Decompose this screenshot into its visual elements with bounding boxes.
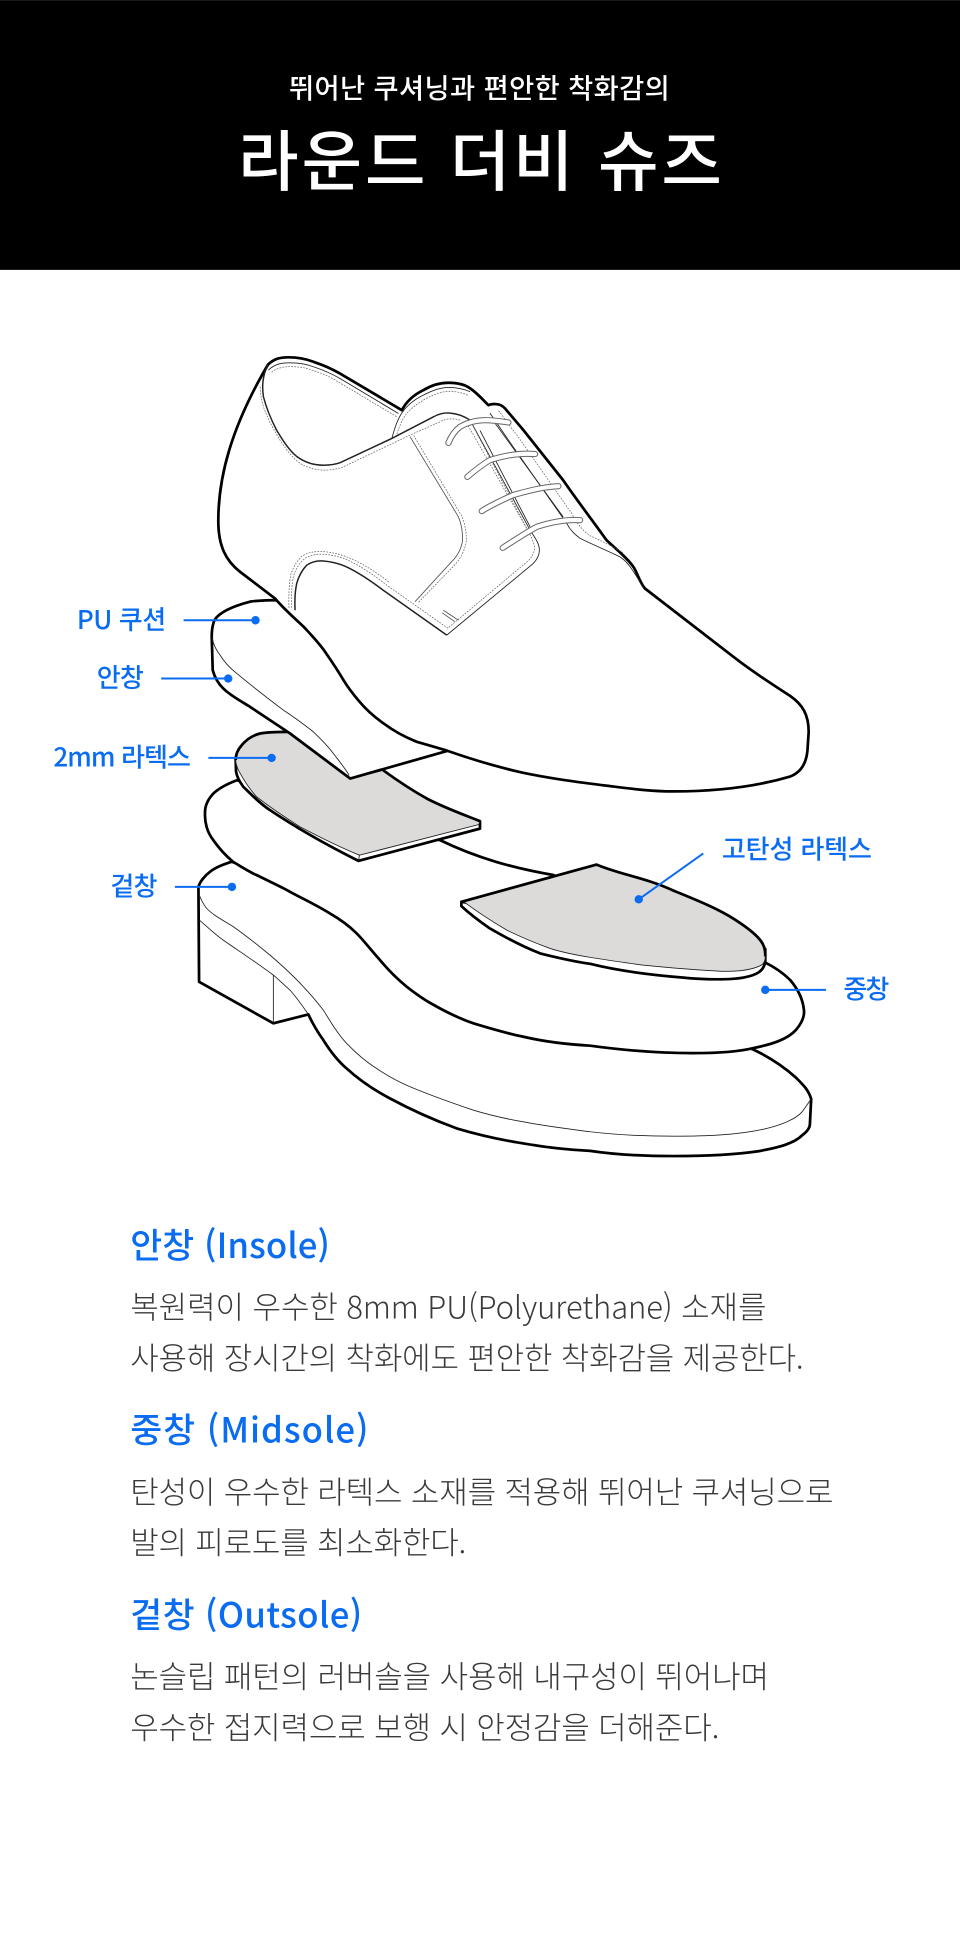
callout: 안창: [97, 658, 232, 695]
body text: insole: 복원력이 우수한 8mm PU(Polyurethane) 소재를: [130, 1283, 767, 1328]
callout: 고탄성 라텍스: 고탄성 라텍스: [722, 829, 872, 866]
heel counter: [295, 561, 447, 635]
exploded shoe illustration: [198, 357, 811, 1156]
heading: outsole: 겉창 (Outsole): [130, 1587, 362, 1637]
facing stitching: [410, 437, 463, 602]
body text: midsole: 발의 피로도를 최소화한다.: [130, 1518, 466, 1563]
tongue stitching: [392, 413, 402, 438]
vamp edge: [447, 420, 539, 635]
laces: [448, 420, 580, 548]
toe latex pad: [461, 865, 765, 979]
shoe upper: [218, 357, 809, 791]
callout: 중창: [761, 970, 889, 1007]
collar stitching: [263, 365, 470, 465]
heel latex pad: [236, 732, 480, 861]
callout: 고탄성 라텍스: [635, 829, 872, 904]
insole: [212, 600, 447, 779]
body text: midsole: [130, 1467, 833, 1563]
section: insole: [130, 1218, 804, 1378]
eye stay: [490, 413, 644, 588]
callout: PU 쿠션: [77, 600, 260, 637]
body text: insole: 사용해 장시간의 착화에도 편안한 착화감을 제공한다.: [130, 1333, 804, 1378]
heading: midsole: 중창 (Midsole): [130, 1403, 368, 1453]
body text: outsole: 논슬립 패턴의 러버솔을 사용해 내구성이 뛰어나며: [130, 1652, 769, 1697]
midsole: [205, 780, 804, 1053]
body text: insole: [130, 1283, 804, 1378]
section: midsole: [130, 1403, 833, 1563]
callout: 겉창: [110, 867, 236, 904]
callout: 안창: 안창: [97, 658, 144, 695]
title: 라운드 더비 슈즈: [238, 109, 722, 204]
callout: 중창: 중창: [843, 970, 889, 1007]
section: outsole: [130, 1587, 769, 1748]
callout: 2mm 라텍스: [53, 738, 276, 775]
body text: outsole: 우수한 접지력으로 보행 시 안정감을 더해준다.: [130, 1703, 719, 1748]
outsole: [198, 862, 811, 1156]
subtitle: 뛰어난 쿠셔닝과 편안한 착화감의: [289, 66, 670, 106]
callout: PU 쿠션: PU 쿠션: [77, 600, 166, 637]
callout: 겉창: 겉창: [110, 867, 158, 904]
body text: outsole: [130, 1652, 769, 1748]
callout: 2mm 라텍스: 2mm 라텍스: [53, 738, 191, 775]
heading: insole: 안창 (Insole): [130, 1218, 330, 1268]
body text: midsole: 탄성이 우수한 라텍스 소재를 적용해 뛰어난 쿠셔닝으로: [130, 1467, 833, 1512]
header banner: [0, 0, 960, 270]
